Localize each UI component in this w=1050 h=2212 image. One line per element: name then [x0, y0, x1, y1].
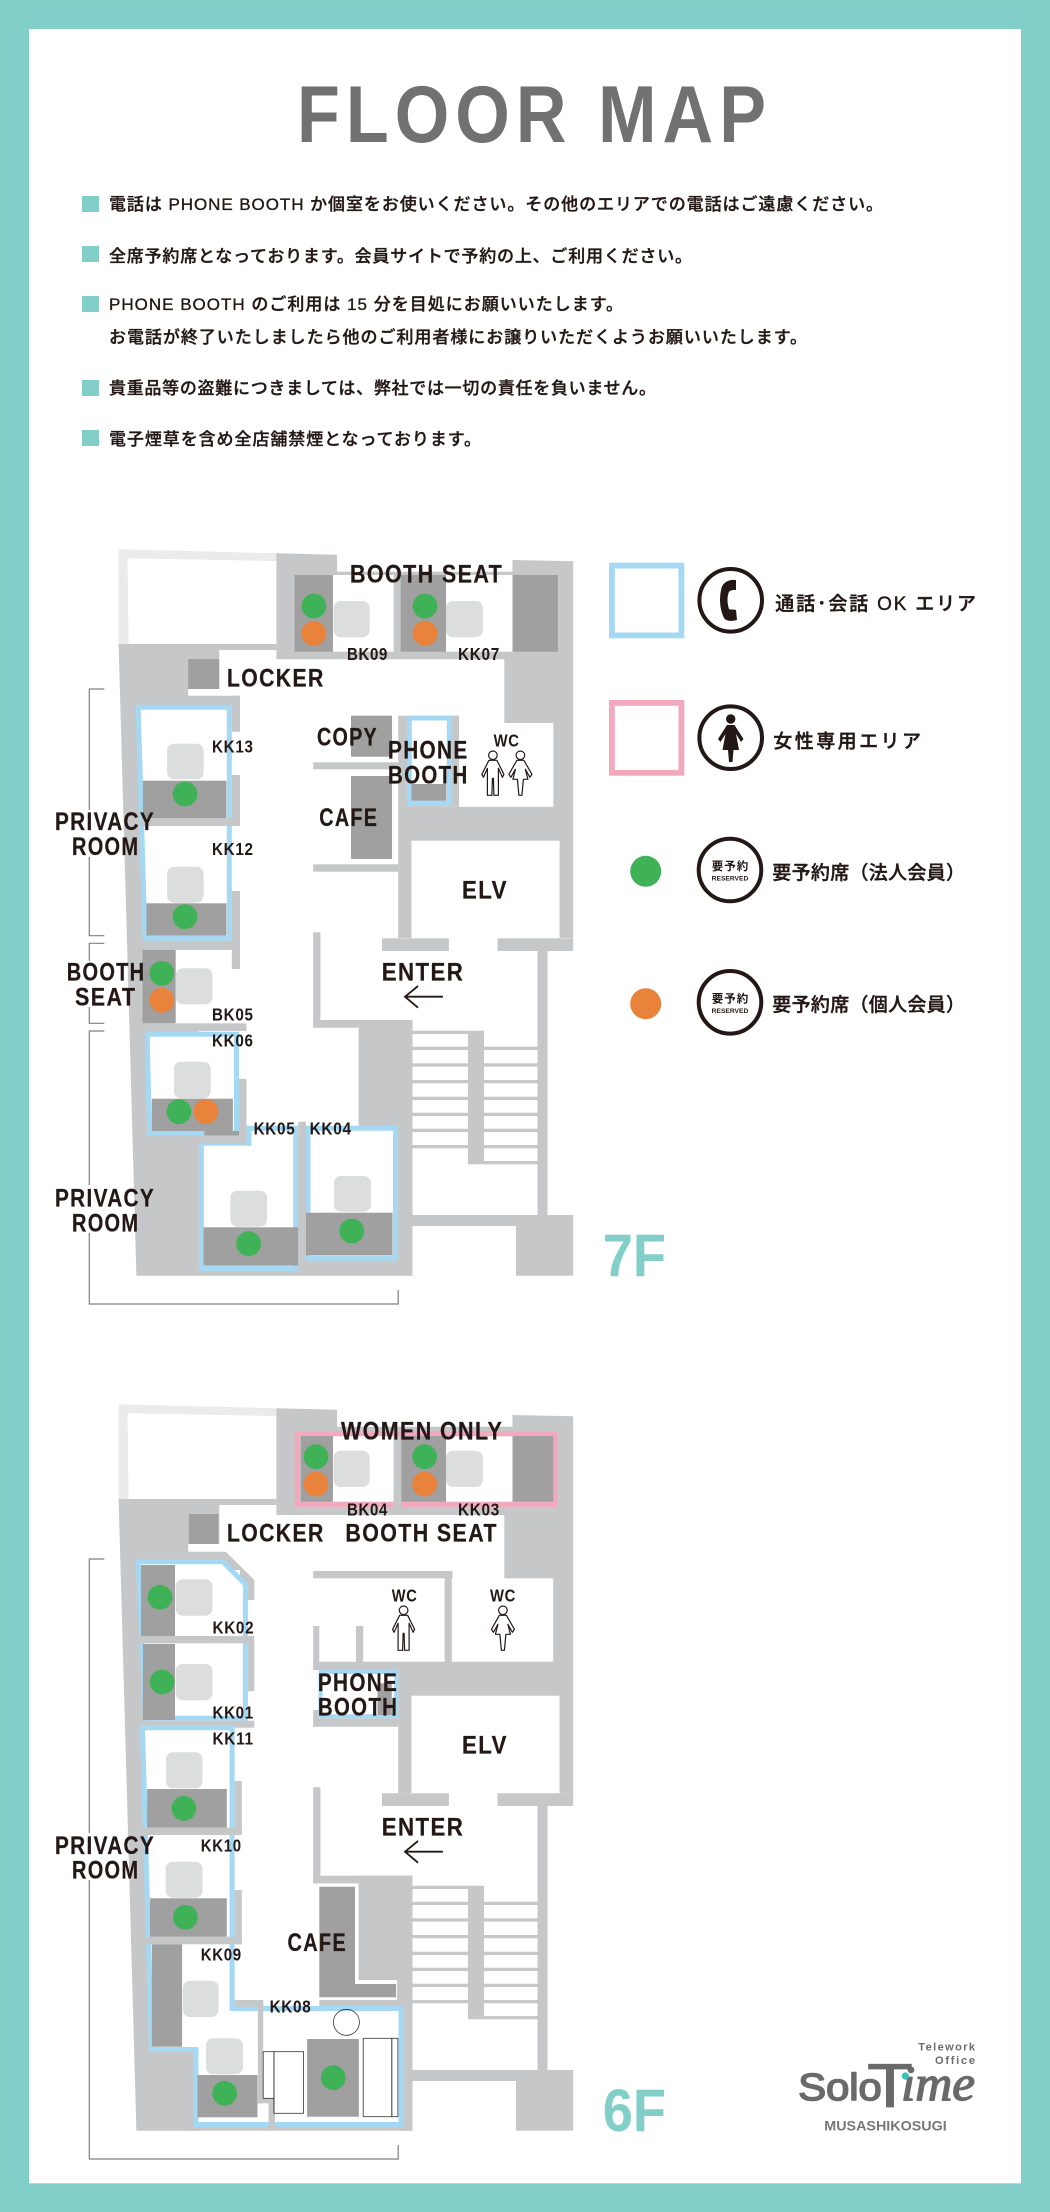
icon: reserved badge: RESERVED	[712, 1008, 749, 1015]
7F rooms KK13 and KK12	[138, 696, 240, 969]
note 4: 貴重品等の盗難につきましては、弊社では一切の責任を負いません。	[109, 379, 656, 398]
7F labels: WC	[494, 731, 520, 751]
6F labels: PRIVACY	[55, 1832, 155, 1860]
logo: ime	[901, 2055, 975, 2111]
legend: women only area	[612, 703, 921, 773]
6F labels	[55, 1417, 516, 2017]
legend: call OK area	[612, 566, 976, 635]
6F floor label: 6F	[603, 2077, 666, 2144]
7F stairs	[412, 1031, 538, 1164]
7F labels: KK13	[212, 737, 254, 757]
icon: reserved badge: RESERVED	[712, 876, 749, 882]
6F labels: ENTER	[382, 1813, 464, 1841]
icon: reserved badge: 要予約	[712, 859, 748, 873]
floor plan: 6F	[55, 1404, 666, 2159]
7F labels: BK05	[212, 1005, 254, 1025]
6F labels: KK08	[270, 1997, 311, 2017]
7F labels: KK04	[310, 1118, 352, 1138]
7F labels: SEAT	[75, 983, 136, 1011]
6F labels: PHONE	[318, 1669, 398, 1697]
icon: man	[393, 1606, 415, 1650]
6F labels: ELV	[462, 1731, 508, 1759]
logo: MUSASHIKOSUGI	[824, 2118, 947, 2134]
icon: woman	[509, 751, 532, 795]
note 1: 電話は PHONE BOOTH か個室をお使いください。その他のエリアでの電話はご遠慮ください。	[109, 195, 883, 214]
icon: woman	[491, 1606, 514, 1650]
logo: Telework	[918, 2042, 976, 2054]
note 3	[82, 295, 807, 347]
legend: reserved individual members: 要予約席（個人会員）	[772, 994, 965, 1016]
7F WC room	[459, 723, 553, 807]
6F rooms KK02 and KK01	[136, 1562, 254, 1728]
6F brackets	[89, 1559, 398, 2159]
6F stairs	[412, 1886, 538, 2019]
6F labels: CAFE	[288, 1929, 347, 1957]
6F labels: WC	[392, 1586, 418, 1606]
7F labels: ROOM	[72, 1210, 139, 1238]
note 2: 全席予約席となっております。会員サイトで予約の上、ご利用ください。	[109, 247, 692, 266]
7F labels: ELV	[462, 876, 508, 904]
icon: reserved badge	[699, 971, 761, 1034]
6F labels: KK02	[212, 1618, 254, 1638]
legend: reserved corporate members: 要予約席（法人会員）	[772, 862, 965, 884]
logo: Office	[935, 2055, 975, 2067]
icon: phone	[699, 569, 762, 632]
6F WC rooms	[393, 1606, 514, 1650]
6F cafe counter	[319, 1887, 396, 1997]
7F labels: KK06	[212, 1031, 254, 1051]
7F labels: KK12	[212, 839, 254, 859]
7F labels: BOOTH	[388, 761, 469, 789]
legend: call OK area: 通話･会話 OK エリア	[775, 593, 976, 615]
7F labels: ROOM	[72, 833, 139, 861]
7F labels: LOCKER	[227, 665, 325, 693]
7F room KK06	[147, 1034, 246, 1143]
notes list	[82, 195, 883, 449]
icon: woman	[699, 706, 762, 769]
6F labels: KK09	[201, 1945, 242, 1965]
7F walls	[119, 549, 573, 1276]
7F labels: BOOTH	[67, 959, 145, 987]
7F booth seat BK05	[128, 941, 246, 1031]
logo: T	[867, 2052, 913, 2121]
title: FLOOR MAP	[297, 70, 772, 160]
logo	[798, 2042, 976, 2134]
6F locker	[189, 1514, 219, 1544]
note 5: 電子煙草を含め全店舗禁煙となっております。	[109, 430, 481, 449]
7F labels: PRIVACY	[55, 808, 155, 836]
6F rooms KK11 to KK08	[140, 1728, 401, 2131]
7F labels: ENTER	[382, 958, 464, 986]
6F walls	[119, 1404, 573, 2131]
7F phone booth room	[409, 718, 449, 803]
6F labels: BOOTH	[318, 1694, 398, 1722]
7F arrow	[405, 986, 443, 1008]
6F labels: BK04	[347, 1499, 388, 1519]
7F labels: CAFE	[319, 804, 378, 832]
floor plan: 7F	[55, 549, 666, 1304]
6F labels: KK11	[212, 1728, 254, 1748]
7F labels: KK07	[458, 644, 500, 664]
7F locker	[188, 659, 219, 689]
7F floor label: 7F	[603, 1222, 666, 1289]
KK08 furniture	[263, 2009, 398, 2117]
7F labels: BOOTH SEAT	[350, 560, 503, 588]
6F labels: LOCKER	[227, 1520, 325, 1548]
7F labels: PRIVACY	[55, 1185, 155, 1213]
legend: reserved individual members	[630, 971, 965, 1034]
7F copy and cafe counters	[351, 716, 392, 859]
icon: reserved badge: 要予約	[712, 991, 748, 1005]
legend: reserved corporate members	[630, 839, 965, 901]
logo: Solo	[798, 2067, 882, 2109]
icon: man	[482, 751, 504, 795]
note 3: お電話が終了いたしましたら他のご利用者様にお譲りいただくようお願いいたします。	[109, 327, 807, 347]
7F labels: BK09	[347, 644, 388, 664]
6F labels: WOMEN ONLY	[341, 1417, 503, 1445]
6F phone booth	[321, 1672, 396, 1716]
7F top booth seats	[295, 575, 558, 652]
icon: reserved badge	[699, 839, 761, 901]
6F labels: BOOTH SEAT	[345, 1520, 498, 1548]
note 3: PHONE BOOTH のご利用は 15 分を目処にお願いいたします。	[109, 295, 623, 314]
7F brackets	[89, 689, 398, 1304]
7F labels: KK05	[254, 1118, 295, 1138]
6F arrow	[405, 1841, 443, 1863]
7F labels	[55, 560, 520, 1238]
6F women only booth seats	[297, 1434, 555, 1507]
6F labels: KK01	[212, 1702, 254, 1722]
6F labels: KK10	[201, 1836, 242, 1856]
7F labels: PHONE	[388, 736, 469, 764]
6F labels: KK03	[458, 1499, 500, 1519]
7F room KK05	[199, 1079, 298, 1268]
7F room KK04	[298, 1122, 395, 1276]
7F labels: COPY	[317, 724, 378, 752]
legend	[612, 566, 976, 1034]
6F labels: ROOM	[72, 1857, 139, 1885]
6F labels: WC	[490, 1586, 516, 1606]
legend: women only area: 女性専用エリア	[773, 730, 921, 752]
